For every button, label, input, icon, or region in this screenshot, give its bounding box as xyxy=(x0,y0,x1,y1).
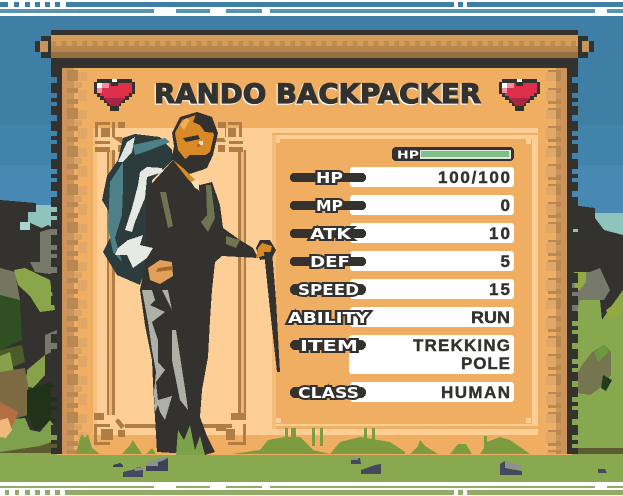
stat row: HP: 100/100 xyxy=(438,168,510,187)
stat row: MP xyxy=(290,195,514,215)
trousers highlights xyxy=(142,290,188,420)
corner ornaments xyxy=(95,122,125,152)
rocks xyxy=(113,457,607,477)
stat row: SPEED: SPEED xyxy=(298,281,359,299)
panel: stats background xyxy=(272,128,544,435)
stat row: ABILITY: ABILITY xyxy=(288,309,370,327)
HP gauge xyxy=(392,147,514,162)
stat row: CLASS: HUMAN xyxy=(441,383,510,402)
stat row: MP: 0 xyxy=(501,196,510,215)
stat row: ITEM: POLE xyxy=(461,354,510,373)
shirt highlights xyxy=(160,185,240,248)
stats panel xyxy=(288,147,514,402)
icon: right heart xyxy=(499,79,540,111)
icon: left heart xyxy=(94,79,135,111)
title: RANDO BACKPACKER xyxy=(154,79,481,110)
panel: portrait background with ornate frame xyxy=(93,122,540,445)
ground xyxy=(0,448,623,496)
stat row: HP xyxy=(290,167,514,187)
white backpack strap xyxy=(125,167,163,232)
background: left trees xyxy=(0,200,57,457)
far hand on pole xyxy=(256,240,276,260)
stat row: ATK: ATK xyxy=(310,225,353,243)
scroll rod xyxy=(35,30,594,68)
grass along parchment bottom xyxy=(76,428,530,454)
trekking pole xyxy=(264,252,280,372)
stat row: ITEM: ITEM xyxy=(300,337,358,355)
stat row: MP: MP xyxy=(316,197,343,215)
lower backpack highlights xyxy=(115,235,153,268)
stat row: CLASS xyxy=(290,382,514,402)
stat row: CLASS: CLASS xyxy=(298,384,359,402)
stat row: HP: HP xyxy=(316,169,343,187)
backpack xyxy=(102,134,173,285)
left knob xyxy=(35,36,51,58)
stat row: SPEED xyxy=(290,279,514,299)
stat row: ATK: 10 xyxy=(489,224,510,243)
stat row: ITEM xyxy=(290,335,514,374)
stat row: ITEM: TREKKING xyxy=(413,336,510,355)
stat row: DEF: DEF xyxy=(310,253,350,271)
bush on the right xyxy=(578,345,611,395)
HP gauge: HP xyxy=(397,148,419,162)
near hand xyxy=(146,258,175,287)
title: RANDO BACKPACKER xyxy=(153,80,480,111)
stat row: DEF: 5 xyxy=(501,252,510,271)
parchment xyxy=(51,68,578,455)
stat row: ATK xyxy=(290,223,514,243)
stat row: ABILITY xyxy=(288,307,514,327)
head xyxy=(172,112,218,192)
stat row: SPEED: 15 xyxy=(489,280,510,299)
background: right trees and hillside xyxy=(572,205,623,460)
character: hiker with backpack xyxy=(102,112,280,455)
top border band xyxy=(0,0,623,16)
right knob xyxy=(578,36,594,58)
stat row: ABILITY: RUN xyxy=(471,308,510,327)
torso and legs xyxy=(140,160,258,455)
grass tufts at feet xyxy=(176,425,205,455)
stat row: DEF xyxy=(290,251,514,271)
